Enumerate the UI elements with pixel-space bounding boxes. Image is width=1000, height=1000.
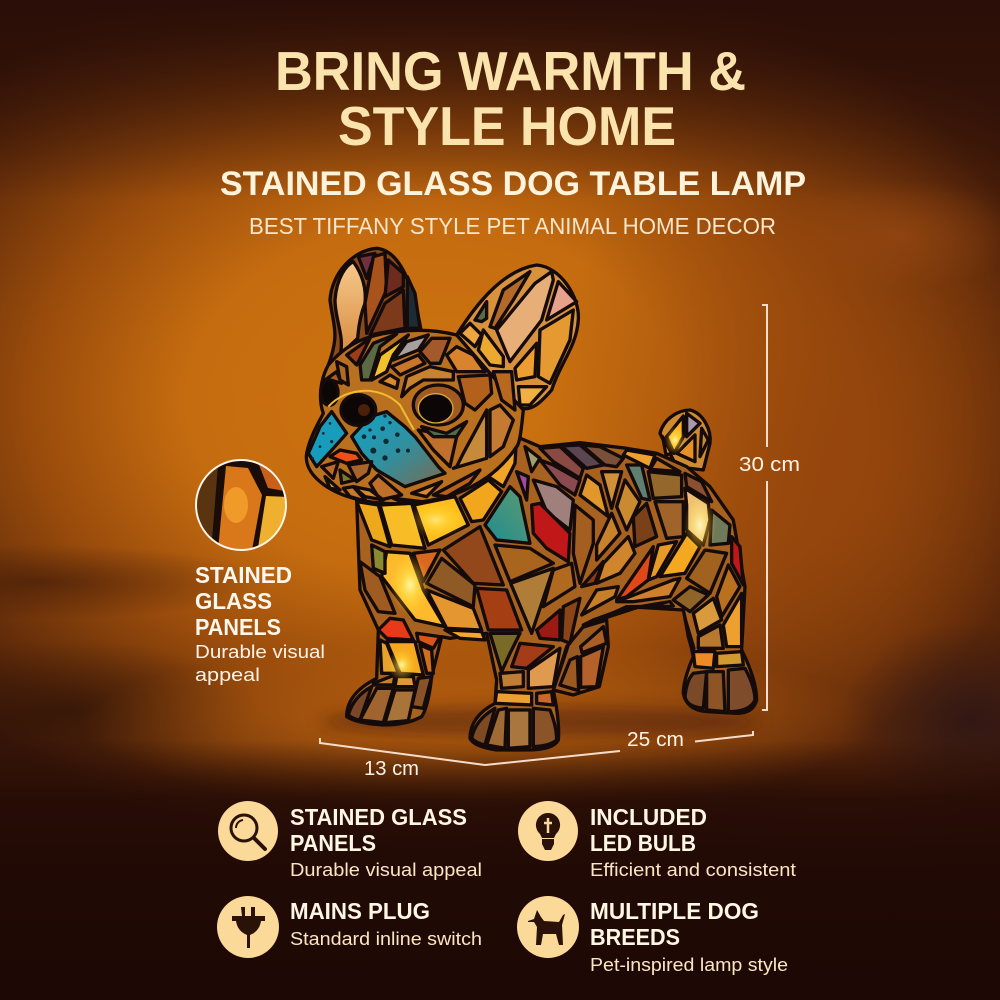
dimension: height 30 cm: 30 cm — [739, 454, 800, 476]
left eye — [321, 380, 338, 405]
title: STYLE HOME — [338, 95, 676, 157]
illustration: stained glass dog lamp — [306, 248, 760, 750]
feature text: Pet-inspired lamp style — [590, 954, 788, 975]
feature text: LED BULB — [590, 830, 696, 856]
feature text: MAINS PLUG — [290, 898, 430, 924]
feature text: Efficient and consistent — [590, 859, 796, 880]
tagline: BEST TIFFANY STYLE PET ANIMAL HOME DECOR — [249, 213, 776, 239]
feature: included LED bulb — [518, 801, 796, 880]
far front leg panels — [348, 618, 440, 723]
lamp light glows — [388, 426, 716, 681]
dimension: width 25 cm: 25 cm — [627, 729, 684, 751]
callout heading: GLASS — [195, 588, 272, 614]
front leg panels — [472, 633, 560, 748]
feature: stained glass panels — [218, 801, 482, 880]
callout heading — [195, 562, 292, 640]
feature: multiple dog breeds — [517, 896, 788, 975]
title: BRING WARMTH & — [275, 40, 746, 102]
head silhouette — [306, 330, 523, 504]
back panels — [485, 445, 682, 562]
callout description: Durable visual — [195, 641, 325, 662]
inset photo — [195, 459, 287, 551]
callout heading: STAINED — [195, 562, 292, 588]
dog body — [347, 437, 757, 750]
feature text — [590, 898, 788, 975]
feature text — [290, 898, 482, 949]
icon: magnifying glass — [218, 801, 278, 861]
icon: bulb — [518, 801, 578, 861]
subtitle: STAINED GLASS DOG TABLE LAMP — [220, 165, 806, 203]
callout: stained glass panels — [190, 455, 325, 685]
feature text: INCLUDED — [590, 804, 707, 830]
feature text: MULTIPLE DOG — [590, 898, 759, 924]
dimension: depth 13 cm: 13 cm — [364, 758, 419, 780]
dimension: depth 13 cm — [320, 738, 485, 780]
title — [275, 40, 746, 157]
dog head and ears — [306, 248, 578, 504]
muzzle — [308, 391, 445, 487]
floor shadow — [320, 706, 760, 738]
left ear — [328, 248, 421, 365]
collar panels — [357, 437, 517, 548]
right ear — [457, 265, 578, 409]
feature text: Standard inline switch — [290, 928, 482, 949]
feature text: Durable visual appeal — [290, 859, 482, 880]
rear leg panels — [685, 593, 755, 712]
chest panels — [360, 527, 580, 643]
feature text: PANELS — [290, 830, 376, 856]
feature text: STAINED GLASS — [290, 804, 467, 830]
muzzle spots — [311, 414, 410, 461]
right eye — [413, 385, 467, 437]
feature: mains plug — [217, 896, 482, 958]
feature text — [290, 804, 482, 880]
dog tail — [660, 410, 710, 470]
callout description — [195, 641, 325, 685]
callout description: appeal — [195, 664, 260, 685]
dimension: height 30 cm — [739, 305, 800, 710]
flank panels — [573, 473, 743, 625]
feature text — [590, 804, 796, 880]
callout heading: PANELS — [195, 614, 281, 640]
dimension: width 25 cm — [485, 729, 753, 765]
feature text: BREEDS — [590, 924, 680, 950]
forehead panels — [325, 334, 515, 468]
icon: plug — [217, 896, 279, 958]
dog rear far leg — [553, 620, 608, 695]
icon: dog — [517, 896, 579, 958]
jaw panels — [322, 462, 480, 503]
